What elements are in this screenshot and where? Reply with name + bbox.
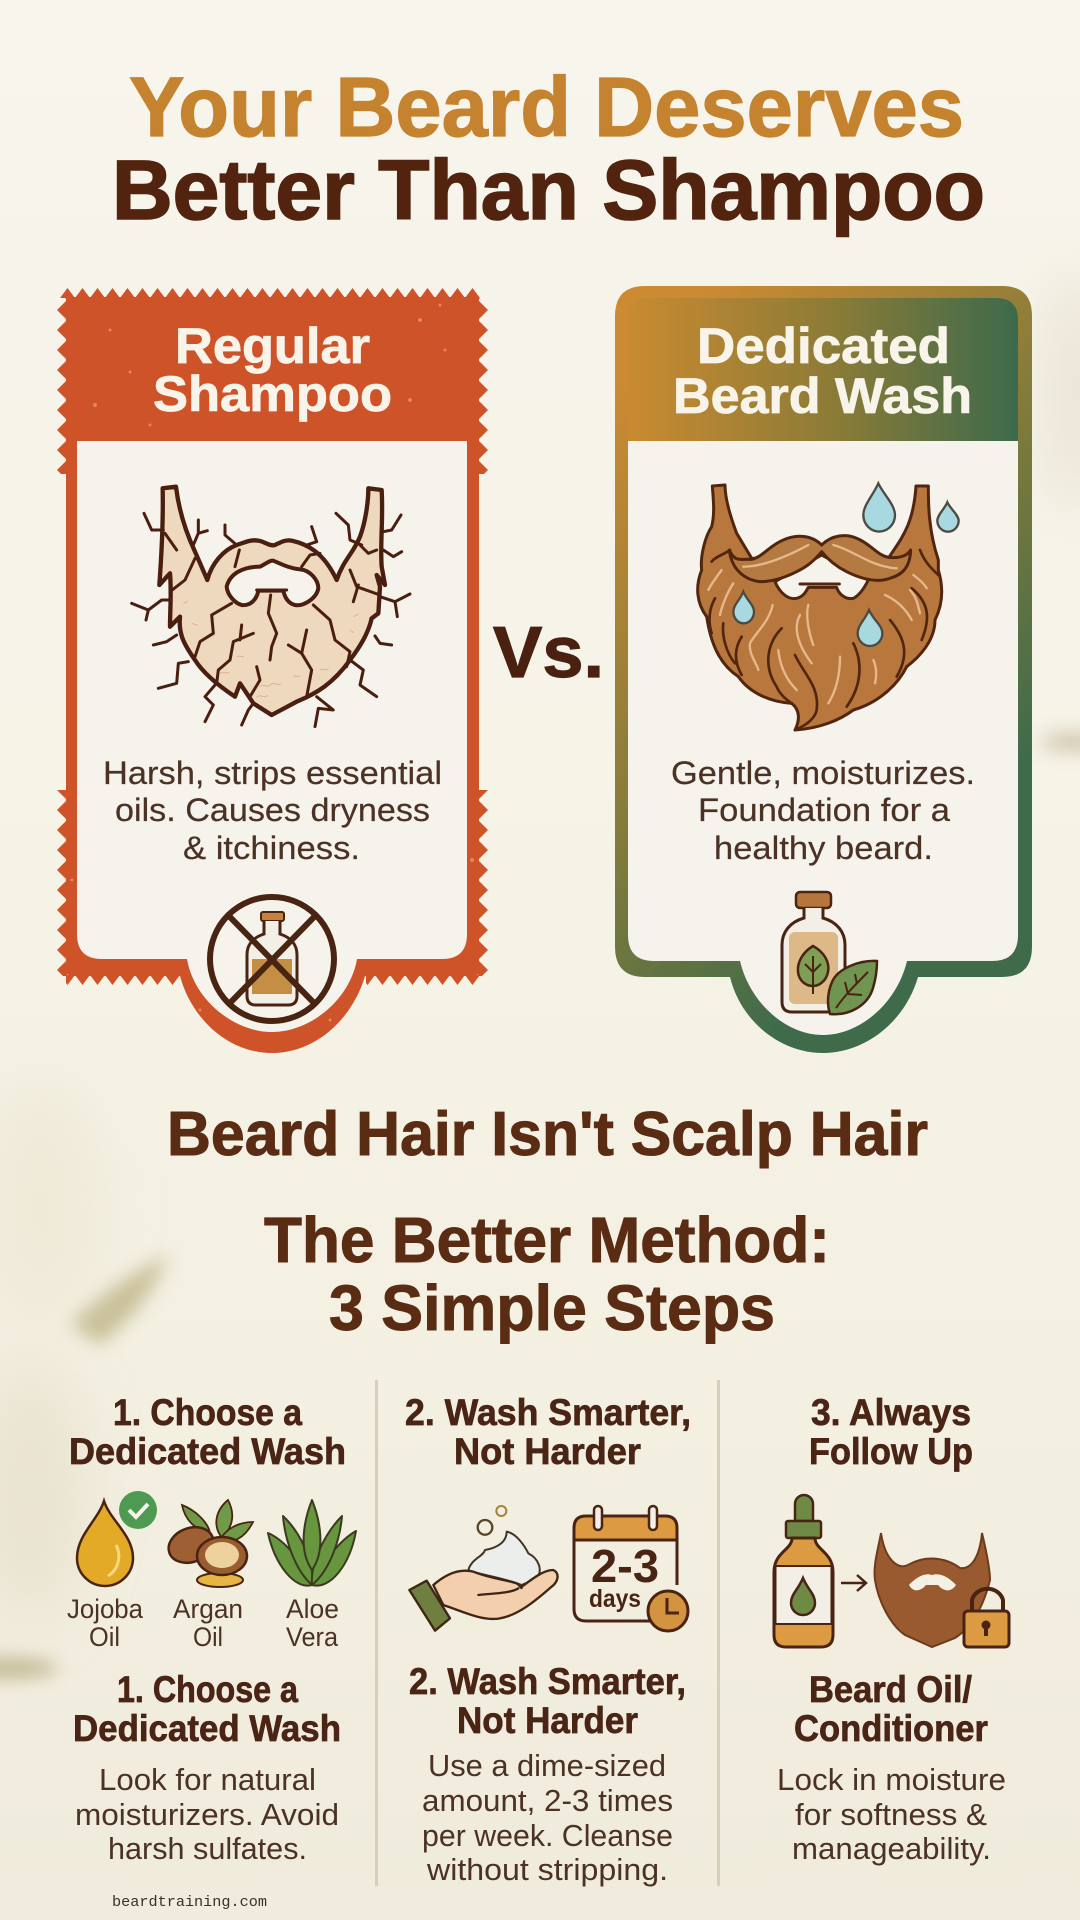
step 3 subheading: Conditioner [794, 1708, 988, 1749]
icon: beard oil bottle [774, 1495, 833, 1647]
ingredient labels: Vera [286, 1622, 339, 1652]
ingredient labels: Oil [89, 1622, 120, 1652]
column dividers [375, 1380, 720, 1886]
step 2 heading: 2. Wash Smarter, [405, 1392, 691, 1433]
ingredient labels [67, 1594, 339, 1652]
icon: hand with foam [409, 1506, 558, 1631]
body text: regular shampoo: & itchiness. [183, 830, 360, 866]
step 2 subheading [409, 1661, 686, 1741]
heading: regular shampoo: Shampoo [153, 366, 392, 422]
body text: regular shampoo: Harsh, strips essential [103, 755, 442, 791]
step 3 body: for softness & [795, 1797, 987, 1832]
step 1 body [75, 1762, 339, 1866]
ingredient labels: Argan [173, 1594, 243, 1624]
icon: calendar 2-3 days with clock: days [589, 1585, 641, 1613]
step 3 heading: 3. Always [811, 1392, 971, 1433]
step 2 body [422, 1748, 673, 1887]
step 2 subheading: Not Harder [457, 1700, 638, 1741]
icon: natural wash bottle with leaf [782, 892, 877, 1014]
step 3 body: manageability. [792, 1831, 991, 1866]
step 3 body: Lock in moisture [777, 1762, 1006, 1797]
heading: beard hair isn't scalp hair: Beard Hair Isn't Scalp Hair [167, 1100, 928, 1169]
step 2 subheading: 2. Wash Smarter, [409, 1661, 686, 1702]
step 2 body: per week. Cleanse [422, 1818, 673, 1853]
panel: dedicated beard wash [615, 286, 1032, 1053]
heading: dedicated beard wash [673, 318, 972, 424]
title: Your Beard Deserves [129, 60, 964, 154]
panel: regular shampoo [57, 288, 488, 1053]
step 1 heading: Dedicated Wash [69, 1431, 346, 1472]
heading: the better method: The Better Method: [264, 1204, 830, 1276]
step 2 body: amount, 2-3 times [422, 1783, 673, 1818]
step 1 heading [69, 1392, 346, 1472]
step 2 body: Use a dime-sized [428, 1748, 666, 1783]
step 1 body: harsh sulfates. [108, 1831, 307, 1866]
icon: healthy beard with drops [698, 483, 959, 730]
step 3 heading: Follow Up [809, 1431, 973, 1472]
heading: dedicated beard wash: Beard Wash [673, 368, 972, 424]
heading: the better method: 3 Simple Steps [329, 1272, 775, 1344]
heading: the better method [264, 1204, 830, 1344]
step 2 heading [405, 1392, 691, 1472]
step 1 body: moisturizers. Avoid [75, 1797, 339, 1832]
icon: argan nuts [164, 1500, 253, 1587]
body text: dedicated beard wash: Gentle, moisturizes. [671, 755, 975, 791]
heading: regular shampoo [153, 318, 392, 422]
step 3 heading [809, 1392, 973, 1472]
step 2 column [405, 1392, 691, 1887]
body text: regular shampoo: oils. Causes dryness [115, 792, 430, 828]
ingredient labels: Aloe [286, 1594, 339, 1624]
step 1 body: Look for natural [99, 1762, 316, 1797]
title: Better Than Shampoo [112, 143, 985, 237]
step 3 column [774, 1392, 1009, 1866]
step 3 subheading [794, 1669, 988, 1749]
icon: calendar 2-3 days with clock: 2-3 [591, 1540, 659, 1592]
step 3 body [777, 1762, 1006, 1866]
vs label: Vs. [493, 613, 604, 693]
website credit: beardtraining.com [112, 1893, 267, 1911]
body text: dedicated beard wash [671, 755, 975, 866]
ingredient labels: Jojoba [67, 1594, 144, 1624]
step 1 column [67, 1392, 356, 1866]
body text: dedicated beard wash: healthy beard. [714, 830, 933, 866]
icon: cracked dry beard [132, 487, 410, 727]
icon: padlock [964, 1589, 1009, 1647]
body text: regular shampoo [103, 755, 442, 866]
icon: aloe vera [268, 1500, 356, 1586]
step 3 subheading: Beard Oil/ [809, 1669, 972, 1710]
icon: calendar 2-3 days with clock [574, 1506, 688, 1631]
step 1 subheading: 1. Choose a [117, 1669, 298, 1710]
title [112, 60, 985, 237]
heading: dedicated beard wash: Dedicated [697, 318, 950, 374]
step 2 heading: Not Harder [454, 1431, 641, 1472]
arrow: oil to beard [841, 1575, 866, 1591]
icon: crossed-out shampoo bottle [210, 897, 334, 1021]
step 1 subheading: Dedicated Wash [73, 1708, 341, 1749]
ingredient labels: Oil [193, 1622, 223, 1652]
body text: dedicated beard wash: Foundation for a [698, 792, 950, 828]
step 1 subheading [73, 1669, 341, 1749]
heading: regular shampoo: Regular [175, 318, 370, 374]
step 2 body: without stripping. [426, 1852, 668, 1887]
icon: jojoba oil drop with check [77, 1491, 157, 1586]
step 1 heading: 1. Choose a [113, 1392, 302, 1433]
icon: soft beard [875, 1533, 990, 1647]
